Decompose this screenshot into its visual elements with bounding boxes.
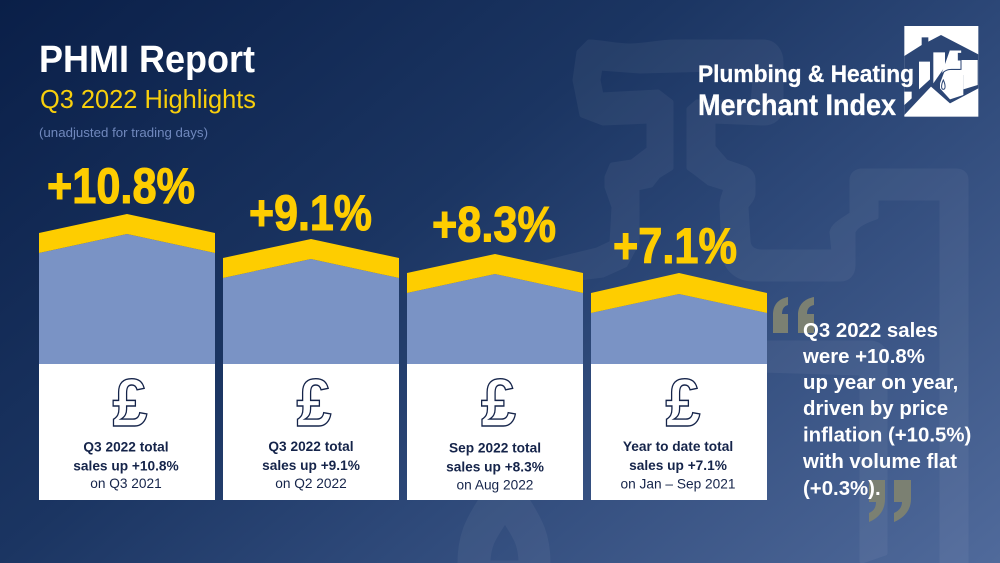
quote text: inflation (+10.5%) bbox=[803, 424, 971, 446]
value: +8.3% bbox=[432, 196, 556, 252]
card text: on Q2 2022 bbox=[275, 476, 347, 491]
card text: Sep 2022 total bbox=[449, 440, 541, 456]
white card bbox=[407, 364, 583, 500]
card text: Year to date total bbox=[623, 439, 733, 454]
panel: Aug 2022 comparison bbox=[407, 196, 583, 500]
card text: sales up +9.1% bbox=[262, 458, 360, 473]
white card bbox=[591, 364, 767, 500]
panel: Q2 2022 comparison bbox=[223, 185, 399, 500]
card text: sales up +8.3% bbox=[446, 460, 544, 474]
card text: Q3 2022 total bbox=[268, 439, 354, 454]
blue bar bbox=[39, 234, 215, 364]
icon: pound: £ bbox=[112, 365, 148, 441]
icon: opening quote bbox=[773, 297, 814, 333]
blue bar bbox=[591, 294, 767, 364]
card text: sales up +7.1% bbox=[629, 458, 727, 473]
note: unadjusted: (unadjusted for trading days) bbox=[39, 126, 208, 140]
quote text: with volume flat bbox=[802, 451, 957, 473]
value: +7.1% bbox=[613, 218, 737, 274]
white card bbox=[223, 364, 399, 500]
yellow cap bbox=[407, 254, 583, 293]
blue bar bbox=[223, 259, 399, 364]
quote text: driven by price bbox=[803, 398, 948, 420]
blue bar bbox=[407, 274, 583, 364]
card text: on Q3 2021 bbox=[90, 476, 162, 491]
yellow cap bbox=[223, 239, 399, 278]
card text: sales up +10.8% bbox=[73, 458, 179, 474]
icon: pound: £ bbox=[296, 365, 332, 441]
subtitle: Q3 2022 Highlights bbox=[40, 84, 256, 114]
background watermark: tap and pipes bbox=[460, 42, 966, 563]
white card bbox=[39, 364, 215, 500]
yellow cap bbox=[591, 273, 767, 313]
icon: closing quote bbox=[869, 480, 911, 522]
icon: pound: £ bbox=[666, 365, 701, 441]
quote text: Q3 2022 sales bbox=[803, 320, 938, 342]
yellow cap bbox=[39, 214, 215, 253]
quote text: up year on year, bbox=[803, 372, 958, 394]
card text: on Jan – Sep 2021 bbox=[621, 476, 735, 492]
quote text: (+0.3%). bbox=[803, 478, 881, 500]
logo icon: house and tap bbox=[904, 26, 978, 117]
logo text line 1: Plumbing & Heating bbox=[698, 61, 914, 88]
panel: Q3 2021 comparison bbox=[39, 158, 215, 500]
card text: on Aug 2022 bbox=[457, 478, 533, 492]
value: +10.8% bbox=[47, 158, 195, 214]
panel: year to date comparison bbox=[591, 218, 767, 500]
title: PHMI Report bbox=[39, 39, 255, 81]
icon: pound: £ bbox=[481, 365, 516, 441]
quote text: were +10.8% bbox=[802, 346, 925, 368]
value: +9.1% bbox=[249, 185, 372, 241]
logo: Plumbing & Heating Merchant Index bbox=[698, 26, 978, 122]
card text: Q3 2022 total bbox=[83, 440, 169, 454]
logo text line 2: Merchant Index bbox=[698, 89, 896, 122]
